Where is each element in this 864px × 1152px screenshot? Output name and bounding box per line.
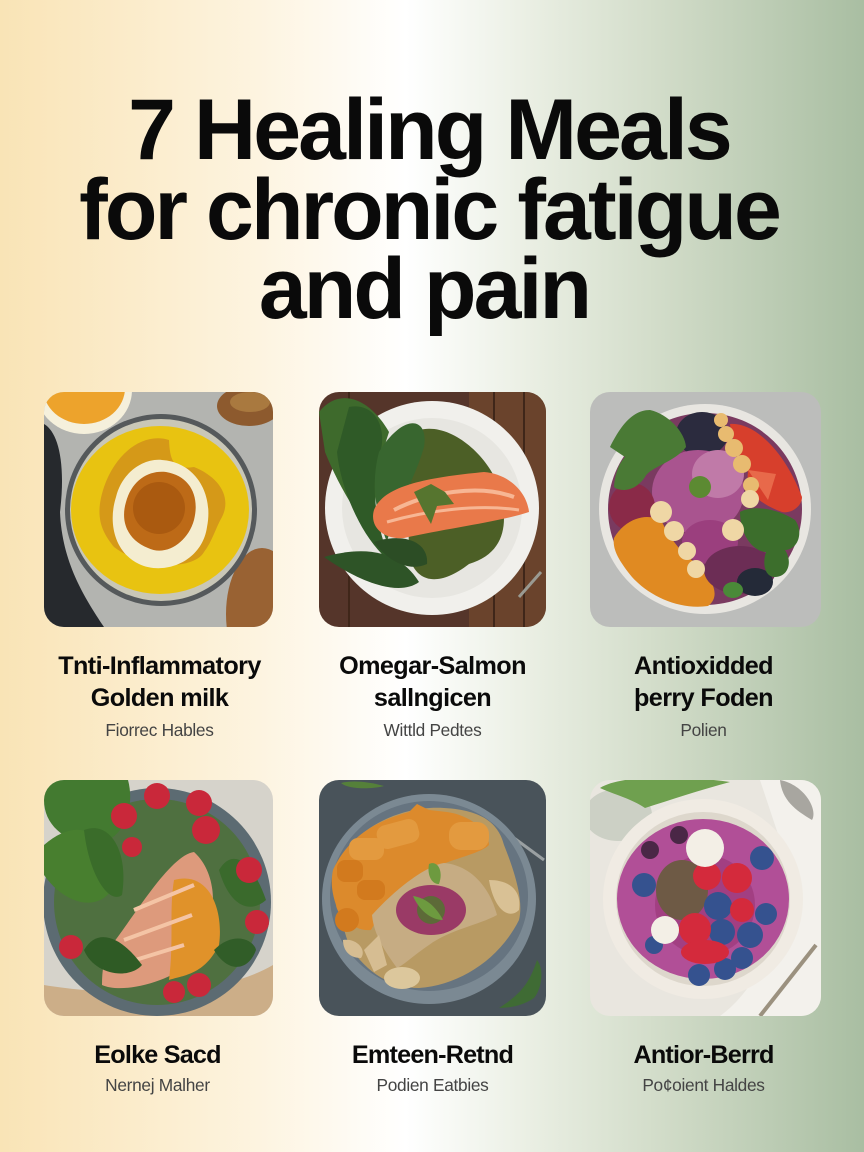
image: leafy salad xyxy=(44,780,273,1016)
caption: golden milk: Fiorrec Hables xyxy=(105,720,214,740)
image: turmeric protein bowl xyxy=(319,780,546,1016)
title: for chronic fatigue xyxy=(79,162,779,258)
caption: turmeric bowl xyxy=(352,1041,513,1095)
title: and pain xyxy=(259,241,589,337)
caption: antioxidant: þerry Foden xyxy=(634,684,773,712)
caption: berry bowl xyxy=(633,1041,774,1095)
caption: leafy salad: Eolke Sacd xyxy=(94,1041,221,1069)
caption: turmeric bowl: Podien Eatbies xyxy=(376,1075,489,1095)
caption: salmon: Wittld Pedtes xyxy=(384,720,481,740)
image: antioxidant bowl xyxy=(590,392,821,627)
title xyxy=(79,82,779,337)
caption: golden milk: Tnti-Inflammatory xyxy=(58,652,261,680)
caption: golden milk: Golden milk xyxy=(91,684,228,712)
caption: leafy salad: Nernej Malher xyxy=(105,1075,210,1095)
caption: antioxidant: Polien xyxy=(680,720,727,740)
caption: berry bowl: Antior-Berrd xyxy=(633,1041,774,1069)
caption: salmon xyxy=(339,652,526,740)
caption: antioxidant xyxy=(634,652,773,740)
caption: berry bowl: Po¢oient Haldes xyxy=(642,1075,765,1095)
title: 7 Healing Meals xyxy=(128,82,730,178)
caption: golden milk xyxy=(58,652,262,740)
caption: turmeric bowl: Emteen-Retnd xyxy=(352,1041,513,1069)
image: salmon plate xyxy=(319,392,546,627)
caption: leafy salad xyxy=(94,1041,221,1095)
caption: salmon: sallngicen xyxy=(374,684,491,712)
image: berry smoothie bowl xyxy=(590,780,821,1016)
image: golden milk xyxy=(44,392,273,627)
caption: antioxidant: Antioxidded xyxy=(634,652,773,680)
caption: salmon: Omegar-Salmon xyxy=(339,652,526,680)
